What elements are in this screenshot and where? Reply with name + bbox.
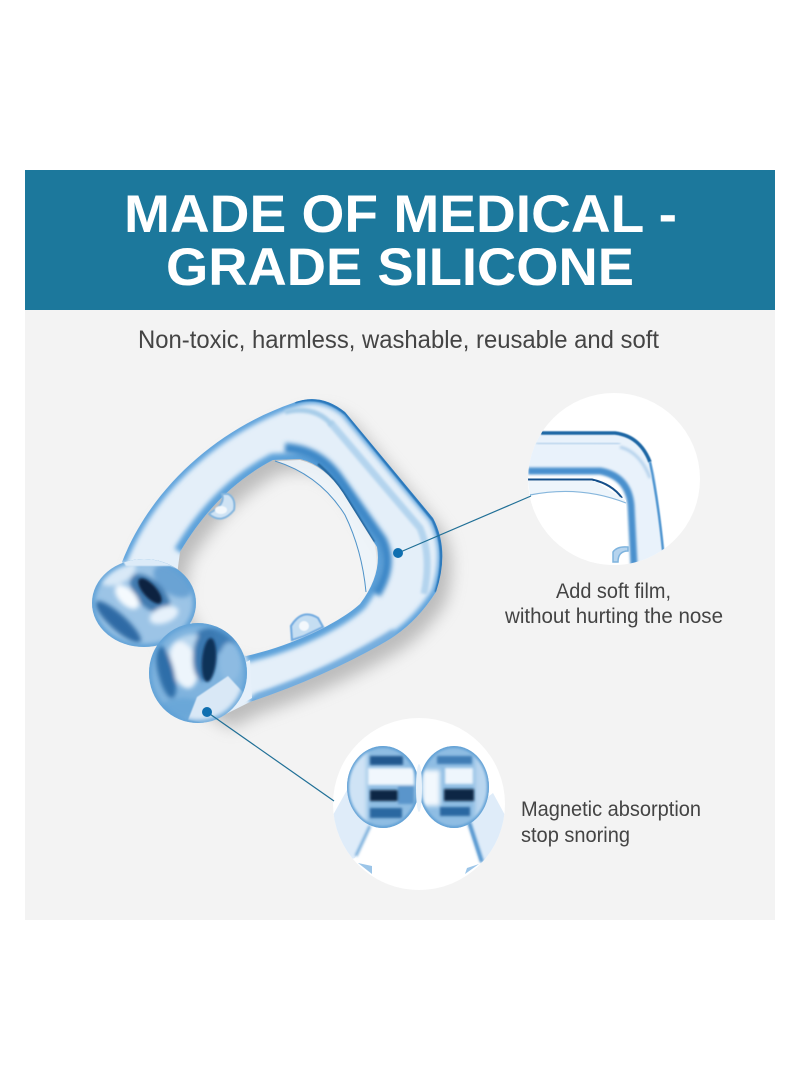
clip neck near lower ball xyxy=(205,660,252,715)
film thin edge xyxy=(530,491,626,503)
inner blue band xyxy=(528,471,634,565)
gap highlight xyxy=(416,764,422,812)
inner dark line xyxy=(528,480,622,498)
title line 1: MADE OF MEDICAL - xyxy=(124,185,677,244)
subtitle: Non-toxic, harmless, washable, reusable and soft xyxy=(138,326,659,354)
clip body xyxy=(122,399,442,716)
caption: soft film: Add soft film, xyxy=(556,579,671,603)
left magnet xyxy=(345,745,419,830)
product: nose clip illustration xyxy=(90,399,451,728)
shoulder band xyxy=(620,447,650,478)
left arm xyxy=(334,790,370,858)
outer right edge xyxy=(650,462,663,550)
outer top-right dark rim xyxy=(295,400,441,592)
top band xyxy=(536,443,620,444)
panel: light grey content area xyxy=(25,310,775,920)
detail circle: soft film xyxy=(525,393,700,570)
left stub xyxy=(358,863,372,874)
caption: magnetic absorption: Magnetic absorption xyxy=(521,797,701,821)
magnet ball lower xyxy=(149,623,250,726)
right arm xyxy=(467,793,506,863)
lower nub xyxy=(291,614,323,640)
clip shading xyxy=(122,399,442,702)
title line 2: GRADE SILICONE xyxy=(166,238,634,297)
detail circle: magnets xyxy=(333,718,506,890)
caption: magnetic absorption xyxy=(521,797,701,847)
small nub xyxy=(613,547,628,562)
film arm xyxy=(525,432,664,570)
inner right blue band xyxy=(285,448,387,594)
right stub xyxy=(465,864,479,874)
left arm edge xyxy=(356,826,370,856)
inner dark line xyxy=(318,464,374,542)
outer edge glow xyxy=(122,399,442,702)
leader line: soft film xyxy=(393,496,531,558)
right arm edge xyxy=(469,822,482,862)
outer dark edge xyxy=(541,433,650,462)
thin film edge xyxy=(275,461,366,592)
caption: soft film: without hurting the nose xyxy=(504,604,723,628)
outer lip band xyxy=(330,422,427,594)
film tint xyxy=(528,481,626,503)
white below arm xyxy=(624,499,626,512)
upper nub xyxy=(209,494,234,519)
right magnet xyxy=(419,745,491,830)
inner edge glow xyxy=(180,459,378,656)
title banner xyxy=(25,170,775,310)
caption: soft film xyxy=(504,579,723,628)
film tint xyxy=(275,460,376,592)
caption: magnetic absorption: stop snoring xyxy=(521,823,630,847)
clip drop shadow xyxy=(131,411,451,728)
leader line: magnet xyxy=(202,707,334,801)
magnet ball upper xyxy=(92,559,196,647)
bottom arm lower shading xyxy=(255,632,395,698)
top shoulder shading xyxy=(285,410,332,425)
